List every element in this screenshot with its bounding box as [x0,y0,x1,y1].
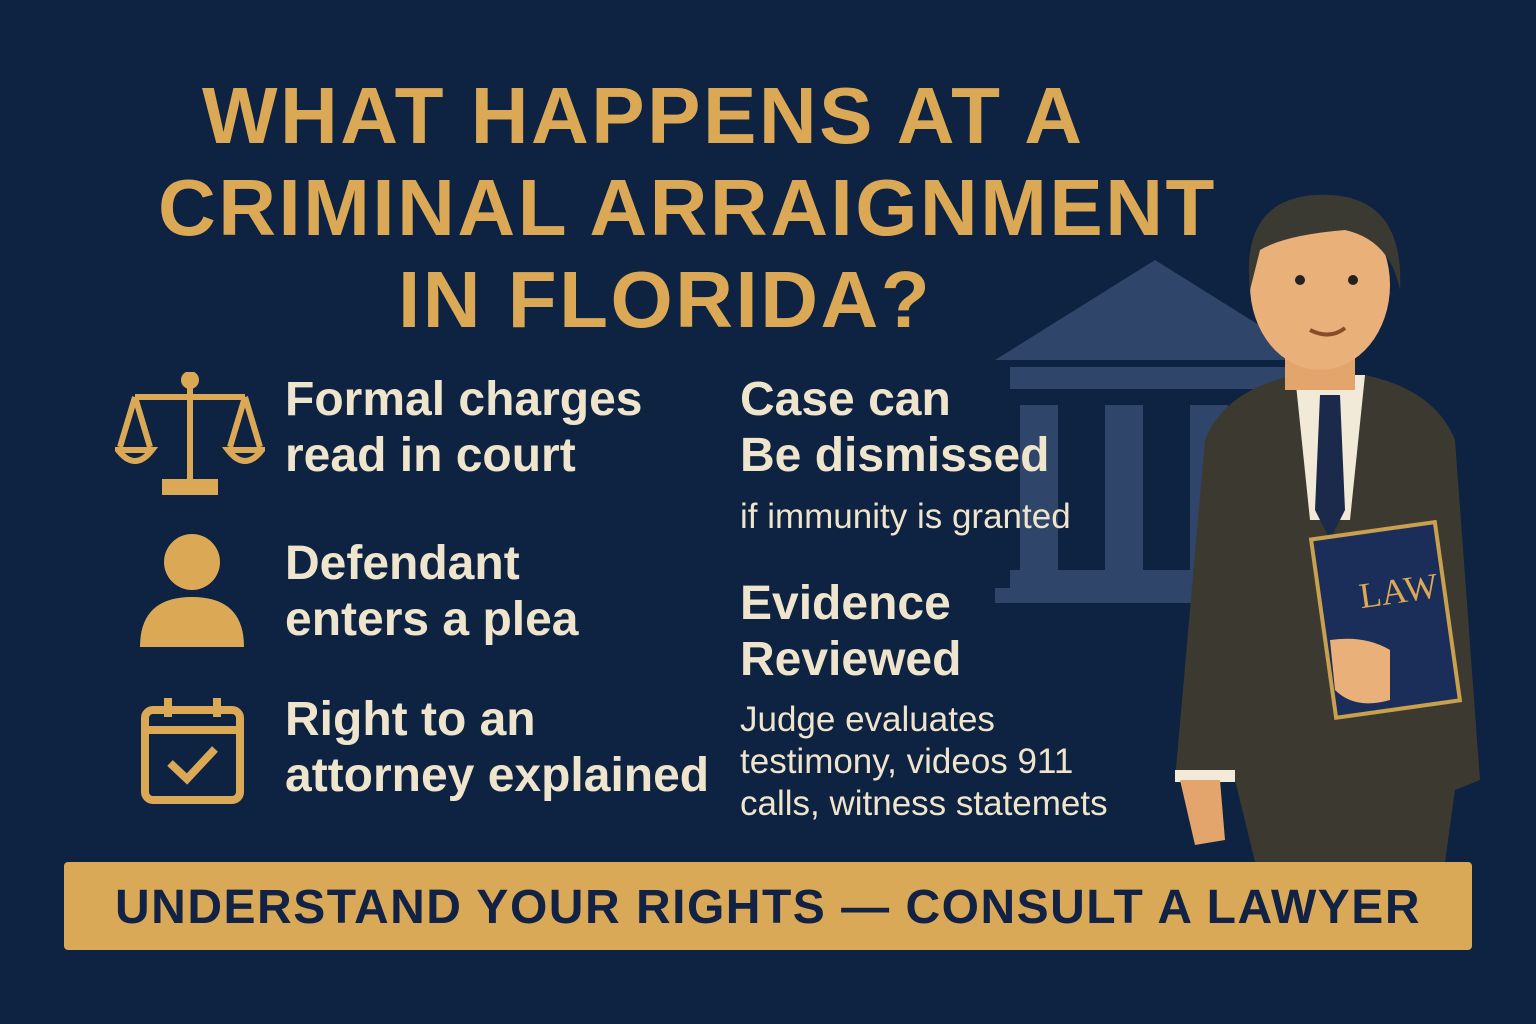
lawyer figure: LAW [1357,566,1441,616]
item: formal charges: Formal charges [285,373,642,426]
banner: UNDERSTAND YOUR RIGHTS — CONSULT A LAWYER [115,881,1421,934]
item: evidence: testimony, videos 911 [740,742,1073,781]
item: plea: Defendant [285,537,520,590]
item: attorney [285,693,709,802]
icon: calendar [141,698,244,804]
item: formal charges: read in court [285,429,576,482]
item: plea [285,537,579,646]
lawyer figure [1175,194,1480,862]
item: evidence: Judge evaluates [740,700,995,739]
title: CRIMINAL ARRAIGNMENT [158,163,1217,252]
item: evidence: calls, witness statemets [740,784,1108,823]
icon: person [140,534,244,647]
title: IN FLORIDA? [398,255,932,344]
item: dismissed [740,373,1071,536]
title [158,71,1217,344]
banner [64,862,1472,950]
item: evidence: Evidence [740,577,951,630]
item: attorney: Right to an [285,693,536,746]
icon: scales [115,372,265,495]
courthouse silhouette [995,260,1285,603]
title: WHAT HAPPENS AT A [202,71,1084,160]
item: dismissed: Case can [740,373,951,426]
item: evidence: Reviewed [740,633,961,686]
item: plea: enters a plea [285,593,578,646]
item: dismissed: if immunity is granted [740,497,1071,536]
item: attorney: attorney explained [285,749,709,802]
item: formal charges [285,373,642,482]
item: dismissed: Be dismissed [740,429,1049,482]
item: evidence [740,577,1108,823]
